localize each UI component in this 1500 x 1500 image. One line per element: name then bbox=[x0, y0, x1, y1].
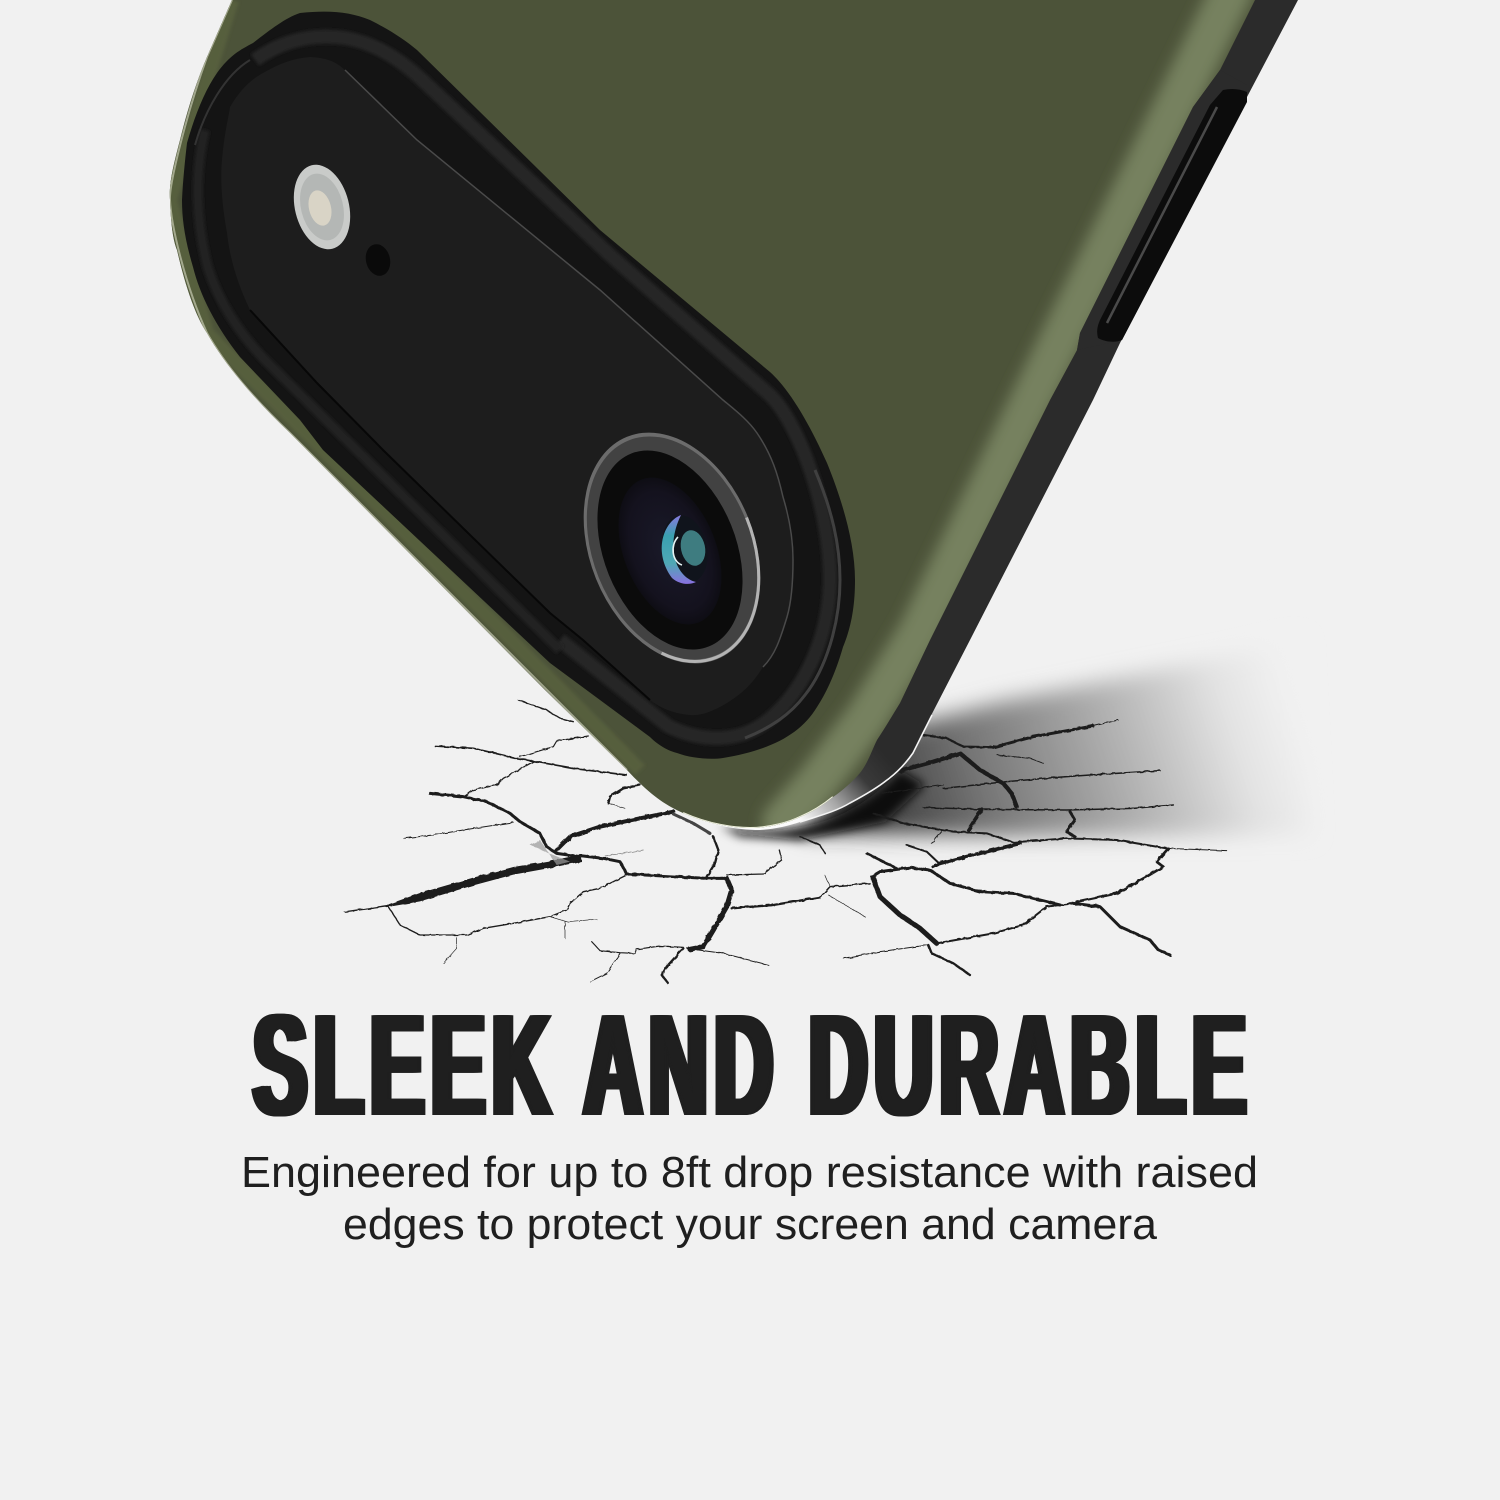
black side band bbox=[170, 0, 1298, 830]
green back panel bbox=[150, 0, 1300, 840]
body line 2: edges to protect your screen and camera bbox=[343, 1200, 1158, 1249]
thin highlight along outer edge at tip bbox=[800, 715, 932, 822]
body line 1: Engineered for up to 8ft drop resistance with raised bbox=[241, 1148, 1258, 1197]
plate edge line bbox=[345, 70, 793, 667]
camera lens bbox=[551, 406, 793, 690]
phone cast shadow bbox=[720, 640, 1310, 840]
island lip highlights bbox=[195, 37, 840, 738]
cracks: right side bbox=[800, 720, 1227, 975]
button highlight bbox=[1107, 107, 1217, 323]
side button bbox=[1097, 89, 1247, 342]
camera plate bbox=[221, 57, 793, 715]
side button recess bbox=[1077, 70, 1247, 350]
body text bbox=[241, 1148, 1258, 1249]
illustration: phone case on cracked floor bbox=[170, 0, 1298, 1248]
plate lower edge line bbox=[250, 310, 650, 700]
microphone hole bbox=[362, 242, 394, 278]
heading: SLEEK AND DURABLE bbox=[253, 984, 1253, 1146]
cracks: left side bbox=[343, 700, 820, 983]
flash bbox=[285, 159, 359, 255]
camera island bbox=[182, 12, 855, 759]
phone case bbox=[150, 0, 1300, 840]
floor cracks bbox=[343, 700, 1227, 983]
